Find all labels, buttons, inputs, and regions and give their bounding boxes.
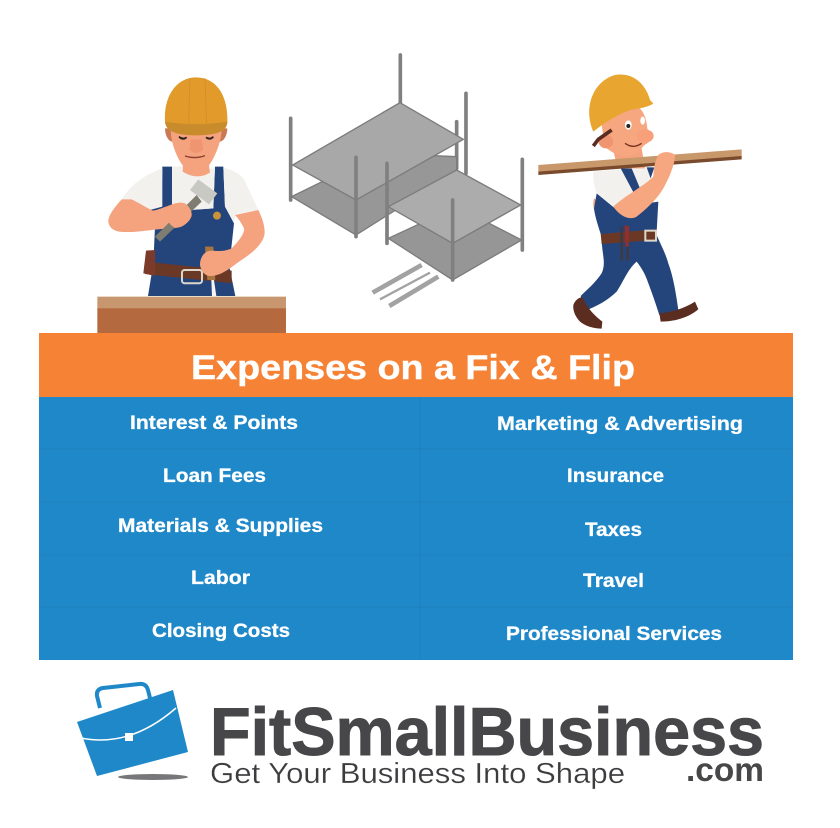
- helmet: [165, 77, 227, 135]
- belt buckle: [182, 270, 202, 283]
- right shoe: [659, 302, 698, 322]
- nose: [636, 129, 654, 143]
- table background: [39, 397, 793, 660]
- small shelf posts: [387, 159, 522, 280]
- heading banner: [39, 333, 793, 397]
- illustration: metal shelving units: [291, 55, 522, 306]
- left shoe: [573, 297, 602, 329]
- helmet ridge: [189, 78, 207, 125]
- tool pouch: [143, 250, 155, 276]
- heading: Expenses on a Fix & Flip: [191, 349, 635, 387]
- overalls button: [213, 212, 221, 220]
- right column: Taxes: [585, 519, 642, 541]
- belt: [601, 229, 657, 244]
- mouth: [625, 143, 642, 146]
- belt buckle: [645, 231, 656, 241]
- shirt: [122, 166, 258, 222]
- right column: Insurance: [567, 465, 664, 487]
- second eye: [640, 117, 645, 125]
- hammer: [155, 179, 217, 242]
- domain: .com: [686, 751, 764, 788]
- nose: [189, 139, 203, 153]
- eye: [625, 120, 632, 130]
- back arm: [593, 198, 605, 220]
- right column: Travel: [583, 570, 644, 592]
- left column: Labor: [191, 567, 250, 589]
- overalls: [148, 167, 235, 296]
- mouth: [185, 156, 205, 158]
- screwdrivers: [622, 227, 628, 261]
- large shelf lower deck: [292, 153, 457, 235]
- briefcase shadow: [118, 774, 188, 780]
- chisel: [205, 247, 215, 280]
- face: [171, 128, 222, 173]
- helmet brim: [165, 122, 227, 135]
- left column: Closing Costs: [152, 620, 290, 642]
- tagline: Get Your Business Into Shape: [210, 758, 625, 790]
- panel: expenses table: [39, 333, 793, 660]
- right column: [497, 413, 743, 645]
- helmet strap: [593, 130, 612, 146]
- neck: [613, 148, 645, 168]
- wordmark: FitSmallBusiness: [210, 694, 764, 770]
- icon: briefcase: [77, 684, 188, 776]
- helmet: [589, 75, 653, 132]
- neck: [183, 160, 210, 176]
- overall strap: [621, 167, 654, 193]
- left column: Loan Fees: [163, 465, 266, 487]
- right arm: [200, 210, 265, 276]
- face: [602, 105, 652, 156]
- left column: Materials & Supplies: [118, 515, 323, 537]
- legs: [581, 235, 678, 315]
- small shelf lower deck: [388, 207, 522, 280]
- small shelf top deck: [388, 170, 521, 243]
- forearm and hand: [613, 152, 675, 218]
- left arm: [108, 199, 192, 232]
- eyes: [179, 137, 213, 139]
- left column: Interest & Points: [130, 412, 298, 434]
- ear: [599, 135, 613, 148]
- ears: [165, 128, 227, 142]
- large shelf rear posts: [400, 55, 466, 173]
- wooden block: [97, 297, 286, 334]
- illustration: worker carrying plank: [538, 75, 742, 329]
- large shelf top deck: [293, 103, 463, 200]
- large shelf front post: [350, 157, 361, 237]
- screwdriver handle: [625, 225, 629, 247]
- large shelf left post: [285, 118, 296, 200]
- belt: [145, 262, 232, 283]
- logo: Fit Small Business: [77, 684, 764, 790]
- left column: [118, 412, 323, 642]
- pupil: [626, 124, 630, 128]
- loose rods: [373, 265, 438, 306]
- shirt: [593, 167, 653, 208]
- left hand: [165, 203, 192, 228]
- plank: [538, 149, 742, 175]
- chisel blade: [211, 280, 216, 296]
- illustration: worker with hammer and chisel: [97, 77, 286, 334]
- right column: Professional Services: [506, 623, 722, 645]
- overalls torso: [594, 193, 658, 237]
- right column: Marketing & Advertising: [497, 413, 743, 435]
